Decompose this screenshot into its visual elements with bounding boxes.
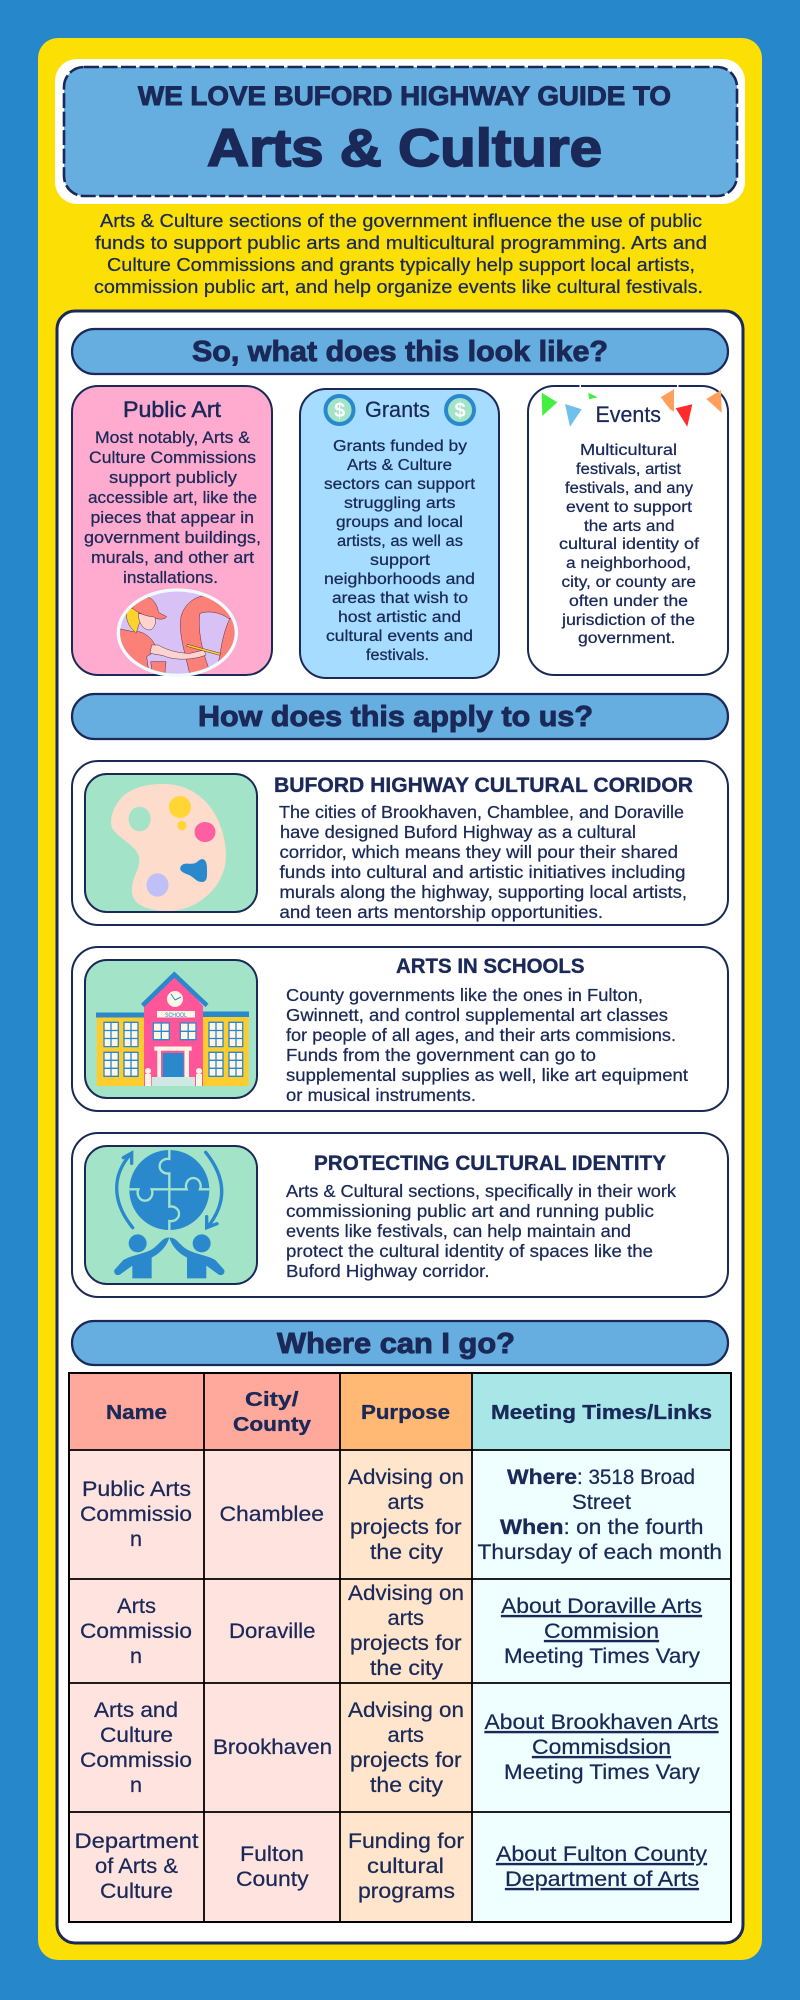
table row: Fulton County: Department bbox=[74, 1830, 199, 1853]
arts in schools text: County governments like the ones in Fulton, bbox=[286, 985, 643, 1005]
table: where can I go bbox=[69, 1373, 731, 1922]
table row: Chamblee: : on the fourth bbox=[564, 1516, 704, 1539]
title: guide line: WE LOVE BUFORD HIGHWAY GUIDE TO bbox=[138, 81, 671, 111]
table row: Doraville: Commissio bbox=[80, 1620, 192, 1643]
icon: school building: SCHOOL bbox=[165, 1013, 188, 1019]
events text: festivals, and any bbox=[565, 480, 693, 497]
heading: how does this apply to us bbox=[72, 694, 728, 739]
icon: pennant bunting bbox=[542, 384, 722, 427]
table row: Doraville: Advising on bbox=[348, 1582, 464, 1605]
icon: dollar coin right bbox=[446, 396, 474, 424]
panel: main white panel bbox=[57, 311, 743, 1943]
cultural corridor text: have designed Buford Highway as a cultural bbox=[280, 822, 636, 842]
table row: Chamblee: arts bbox=[388, 1491, 424, 1514]
table row: Chamblee: Commissio bbox=[80, 1503, 192, 1526]
cultural corridor text: corridor, which means they will pour their shared bbox=[280, 842, 678, 862]
table row: Doraville: Doraville bbox=[229, 1620, 316, 1643]
protecting cultural identity text: commissioning public art and running public bbox=[286, 1201, 654, 1221]
grants text: areas that wish to bbox=[332, 590, 468, 607]
cultural corridor text: The cities of Brookhaven, Chamblee, and Doraville bbox=[279, 802, 684, 822]
table row: Brookhaven: projects for bbox=[350, 1749, 462, 1772]
table row: Chamblee: Street bbox=[572, 1491, 631, 1514]
table row: Doraville: projects for bbox=[350, 1632, 462, 1655]
table row: Chamblee: Advising on bbox=[348, 1466, 464, 1489]
events text: government. bbox=[578, 630, 676, 647]
arts in schools text: Gwinnett, and control supplemental art classes bbox=[286, 1005, 668, 1025]
public art text bbox=[84, 429, 261, 587]
panel: events bbox=[528, 384, 728, 675]
heading: how does this apply to us: How does this apply to us? bbox=[198, 701, 593, 733]
icon: school building bbox=[85, 960, 257, 1098]
panel: arts in schools bbox=[72, 947, 728, 1111]
icon: dollar coin left bbox=[326, 396, 354, 424]
icon: dollar coin left: $ bbox=[334, 400, 345, 422]
table row: Doraville: Commision bbox=[544, 1620, 659, 1643]
public art text: murals, and other art bbox=[91, 549, 254, 567]
arts in schools text: supplemental supplies as well, like art equipment bbox=[286, 1065, 688, 1085]
grants text: neighborhoods and bbox=[324, 571, 475, 588]
table row: Brookhaven: the city bbox=[370, 1774, 444, 1797]
cultural corridor text: and teen arts mentorship opportunities. bbox=[280, 902, 603, 922]
table row: Chamblee: : 3518 Broad bbox=[577, 1466, 695, 1489]
table row: Chamblee: Thursday of each month bbox=[478, 1541, 722, 1564]
table row: Brookhaven: Meeting Times Vary bbox=[504, 1761, 701, 1784]
public art text: accessible art, like the bbox=[88, 489, 257, 507]
table row: Chamblee: Where bbox=[507, 1466, 577, 1489]
events text: city, or county are bbox=[562, 574, 696, 591]
grants text: cultural events and bbox=[326, 628, 473, 645]
arts in schools text: for people of all ages, and their arts commisions. bbox=[286, 1025, 676, 1045]
heading: so, what does this look like bbox=[72, 329, 728, 374]
events text: jurisdiction of the bbox=[561, 612, 695, 629]
cultural corridor text bbox=[279, 802, 687, 922]
grants text: festivals. bbox=[366, 647, 429, 664]
heading: public art: Public Art bbox=[123, 397, 221, 422]
table row: Fulton County: cultural bbox=[367, 1855, 444, 1878]
grants text bbox=[324, 438, 476, 664]
table row: Chamblee: Public Arts bbox=[82, 1478, 191, 1501]
heading: arts in schools: ARTS IN SCHOOLS bbox=[396, 955, 584, 978]
table row: Brookhaven: arts bbox=[388, 1724, 424, 1747]
icon: dollar coin right: $ bbox=[454, 400, 466, 422]
events text: Multicultural bbox=[580, 442, 677, 459]
arts in schools text: Funds from the government can go to bbox=[286, 1045, 596, 1065]
table row: Doraville bbox=[80, 1582, 702, 1680]
grants text: Grants funded by bbox=[333, 438, 467, 455]
grants text: struggling arts bbox=[344, 495, 456, 512]
protecting cultural identity text bbox=[286, 1181, 676, 1281]
events text: the arts and bbox=[584, 518, 674, 535]
grants text: Arts & Culture bbox=[347, 457, 452, 474]
icon: artist painting a mural bbox=[117, 590, 238, 676]
cultural corridor text: murals along the highway, supporting local artists, bbox=[280, 882, 687, 902]
table row: Chamblee: Chamblee bbox=[220, 1503, 324, 1526]
grants text: sectors can support bbox=[324, 476, 476, 493]
events text bbox=[559, 442, 700, 647]
table row: Brookhaven: Commissio bbox=[80, 1749, 192, 1772]
table row: Fulton County: Funding for bbox=[348, 1830, 464, 1853]
panel: cultural corridor bbox=[72, 761, 728, 925]
protecting cultural identity text: Arts & Cultural sections, specifically in their work bbox=[286, 1181, 676, 1201]
table row: Chamblee: projects for bbox=[350, 1516, 462, 1539]
arts in schools text: or musical instruments. bbox=[286, 1085, 476, 1105]
grants text: host artistic and bbox=[338, 609, 461, 626]
intro text: Culture Commissions and grants typically help support local artists, bbox=[107, 254, 695, 275]
table row: Chamblee bbox=[80, 1466, 722, 1564]
table row: Fulton County: About Fulton County bbox=[496, 1843, 708, 1866]
intro text: funds to support public arts and multicultural programming. Arts and bbox=[95, 232, 707, 253]
public art text: government buildings, bbox=[84, 529, 261, 547]
table header row bbox=[106, 1389, 712, 1436]
protecting cultural identity text: Buford Highway corridor. bbox=[286, 1261, 490, 1281]
events text: cultural identity of bbox=[559, 536, 700, 553]
table header row: City/ bbox=[245, 1389, 299, 1411]
protecting cultural identity text: protect the cultural identity of spaces like the bbox=[286, 1241, 653, 1261]
icon: puzzle globe held by two people bbox=[85, 1146, 257, 1284]
public art text: Most notably, Arts & bbox=[95, 429, 250, 447]
heading: grants: Grants bbox=[365, 397, 430, 422]
table row: Fulton County bbox=[74, 1830, 708, 1903]
table row: Chamblee: n bbox=[130, 1528, 142, 1551]
title: arts and culture: Arts & Culture bbox=[207, 119, 602, 178]
arts in schools text bbox=[286, 985, 688, 1105]
panel: public art bbox=[72, 386, 272, 676]
title block bbox=[55, 59, 745, 204]
table row: Brookhaven: About Brookhaven Arts bbox=[484, 1711, 718, 1734]
events text: often under the bbox=[569, 593, 688, 610]
table row: Doraville: n bbox=[130, 1645, 142, 1668]
table row: Fulton County: Department of Arts bbox=[505, 1868, 699, 1891]
events text: festivals, artist bbox=[576, 461, 682, 478]
table row: Fulton County: Fulton bbox=[240, 1843, 304, 1866]
grants text: groups and local bbox=[336, 514, 463, 531]
table header row: Name bbox=[106, 1402, 167, 1424]
table header row: Meeting Times/Links bbox=[491, 1402, 712, 1424]
heading: where can I go: Where can I go? bbox=[277, 1328, 515, 1360]
heading: where can I go bbox=[72, 1321, 728, 1365]
events text: event to support bbox=[566, 499, 693, 516]
table row: Doraville: About Doraville Arts bbox=[501, 1595, 702, 1618]
table row: Doraville: arts bbox=[388, 1607, 424, 1630]
heading: so, what does this look like: So, what does this look like? bbox=[192, 336, 608, 368]
intro text: commission public art, and help organize events like cultural festivals. bbox=[94, 276, 703, 297]
table row: Brookhaven: Arts and bbox=[94, 1699, 178, 1722]
cultural corridor text: funds into cultural and artistic initiatives including bbox=[280, 862, 686, 882]
table row: Chamblee: the city bbox=[370, 1541, 444, 1564]
public art text: support publicly bbox=[109, 469, 238, 487]
table row: Fulton County: of Arts & bbox=[95, 1855, 178, 1878]
panel: protecting cultural identity bbox=[72, 1133, 728, 1297]
table row: Doraville: Arts bbox=[117, 1595, 156, 1618]
table row: Doraville: the city bbox=[370, 1657, 444, 1680]
table header row: County bbox=[233, 1414, 312, 1436]
events text: a neighborhood, bbox=[566, 555, 691, 572]
table row: Fulton County: County bbox=[236, 1868, 309, 1891]
icon: paint palette bbox=[85, 774, 257, 912]
table row: Brookhaven bbox=[80, 1699, 718, 1797]
heading: protecting cultural identity: PROTECTING CULTURAL IDENTITY bbox=[314, 1152, 666, 1175]
table row: Fulton County: Culture bbox=[100, 1880, 173, 1903]
intro text bbox=[94, 210, 707, 297]
public art text: pieces that appear in bbox=[90, 509, 254, 527]
heading: events: Events bbox=[596, 402, 661, 427]
table row: Brookhaven: Culture bbox=[100, 1724, 173, 1747]
grants text: artists, as well as bbox=[337, 533, 463, 550]
table row: Doraville: Meeting Times Vary bbox=[504, 1645, 701, 1668]
table row: Brookhaven: Commisdsion bbox=[532, 1736, 671, 1759]
table row: Fulton County: programs bbox=[358, 1880, 455, 1903]
grants text: support bbox=[370, 552, 431, 569]
public art text: Culture Commissions bbox=[89, 449, 256, 467]
table row: Chamblee: When bbox=[500, 1516, 564, 1539]
panel: grants bbox=[300, 389, 499, 678]
intro text: Arts & Culture sections of the government influence the use of public bbox=[100, 210, 702, 231]
table header row: Purpose bbox=[361, 1402, 450, 1424]
protecting cultural identity text: events like festivals, can help maintain and bbox=[286, 1221, 631, 1241]
table row: Brookhaven: Brookhaven bbox=[213, 1736, 332, 1759]
table row: Brookhaven: n bbox=[130, 1774, 142, 1797]
heading: buford highway cultural coridor: BUFORD HIGHWAY CULTURAL CORIDOR bbox=[274, 774, 693, 797]
table row: Brookhaven: Advising on bbox=[348, 1699, 464, 1722]
public art text: installations. bbox=[123, 569, 218, 587]
